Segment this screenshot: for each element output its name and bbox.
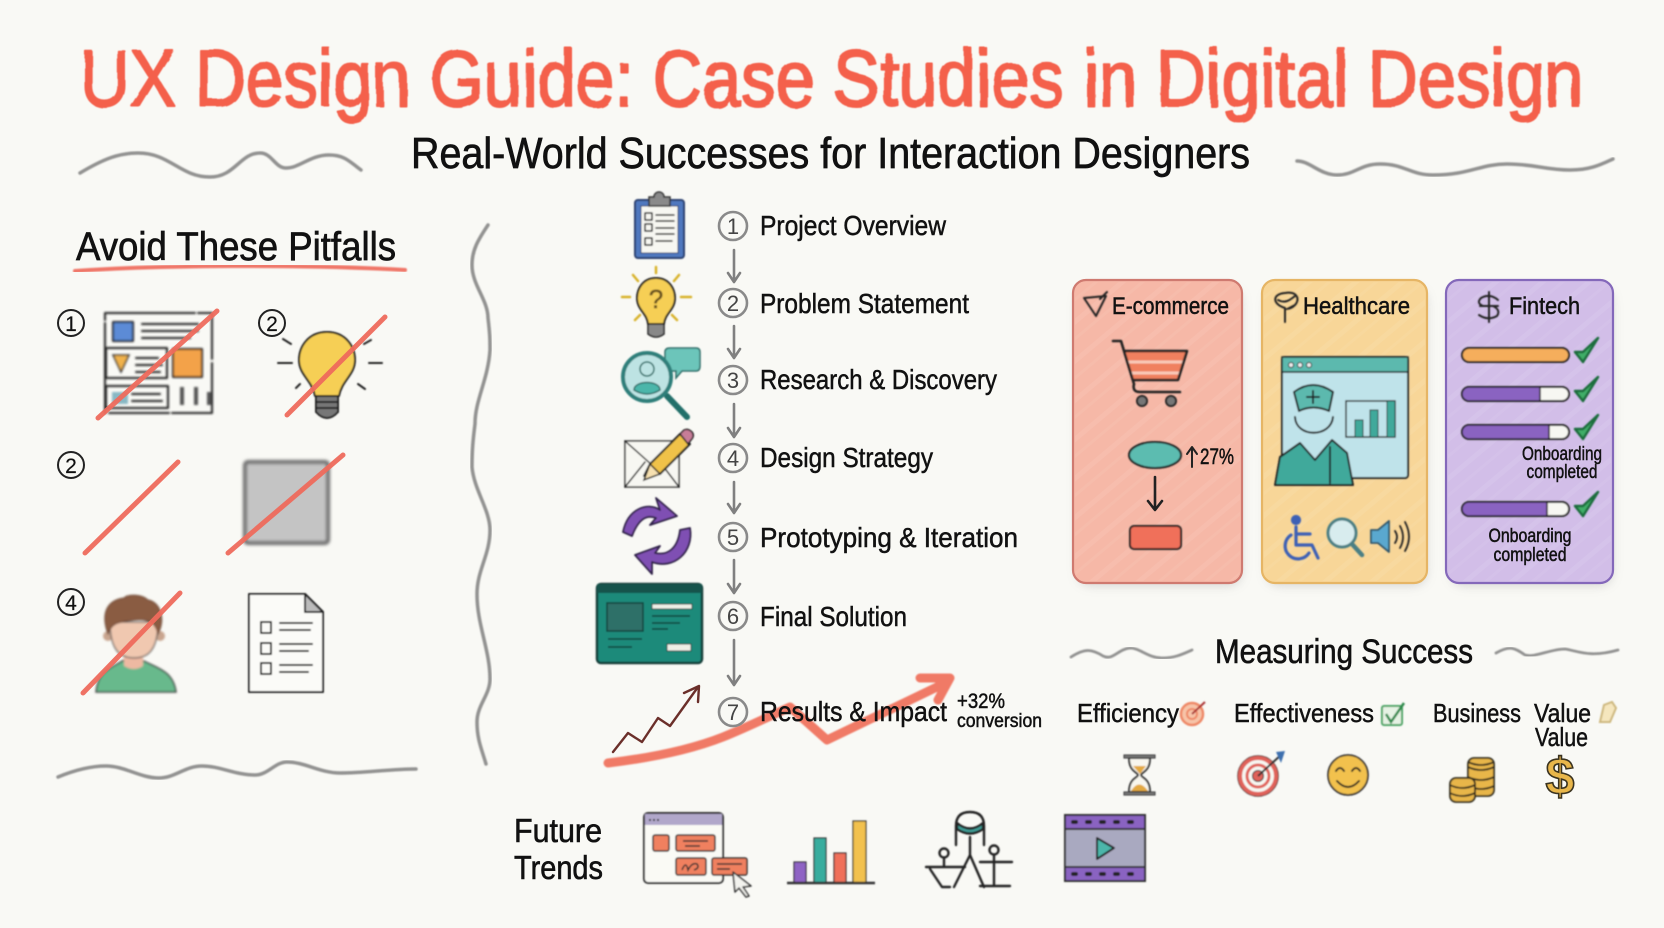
onboarding note 2: completed [1494,545,1566,566]
card background [1073,280,1242,586]
panel: avoid these pitfalls [58,225,405,693]
metric: business value: Business [1433,698,1521,728]
arrow 6 to 7 [728,640,740,685]
metric: business value: Value [1534,698,1591,728]
progress bar 1 [1462,338,1598,362]
number 2: 2 [266,313,278,336]
icon: funnel [1084,292,1107,316]
progress bar 4 [1462,492,1598,516]
right squiggle [1496,648,1618,656]
icon: shopping cart [1113,341,1187,406]
progress bar 2 [1462,377,1598,401]
step 3: 3 [727,368,739,393]
step 6: 6 [727,604,739,629]
number 1: 1 [65,313,77,336]
onboarding note 1 [1522,444,1602,483]
icon: final solution window [597,584,702,663]
step 1: Project Overview [760,210,947,241]
metric: efficiency: Efficiency [1077,698,1179,728]
step 5: Prototyping & Iteration [760,522,1018,553]
icon: hourglass [1124,755,1155,795]
step 4: Design Strategy [760,442,933,473]
icon: video film strip [1065,815,1145,881]
vertical divider squiggle [472,225,490,764]
icon: growth arrow chart [613,686,699,752]
icon: speaker [1371,521,1409,552]
panel: e-commerce card [1073,280,1242,586]
number 4: 4 [65,592,77,615]
left squiggle [1071,648,1192,658]
icon: green check box [1382,703,1404,725]
panel: measuring success [1071,633,1618,806]
illustration: telehealth window [1275,357,1408,485]
icon: bar chart [787,821,875,883]
right title squiggle [1297,159,1613,175]
metric: business value: Value [1535,722,1588,752]
uplift 27 percent: 27% [1200,444,1234,469]
icon: dollar grid [1479,292,1498,322]
panel: fintech card [1446,280,1613,586]
card background [1446,280,1613,586]
number 2 [259,310,285,336]
future trends label: Trends [514,849,603,886]
heading: Measuring Success [1215,633,1473,671]
icon: orange target [1181,702,1205,725]
panel: healthcare card [1262,280,1427,586]
icon: light bulb [278,332,382,418]
accessibility icons [1285,516,1409,559]
icon: clipboard [635,192,684,258]
onboarding note 2 [1488,526,1572,566]
arrow 1 to 2 [728,250,740,282]
large coral trend arrow [608,678,950,763]
heading underline [75,266,405,271]
uplift 27 percent [1187,444,1234,469]
step 5: 5 [727,525,739,550]
icon: grey square [245,462,328,543]
number 1 [58,310,84,336]
flow arrow [1148,477,1162,510]
step 2: 2 [727,291,739,316]
icon: question bulb [622,267,691,337]
step 7: 7 [727,700,739,725]
arrow 3 to 4 [728,404,740,437]
step 6 [719,601,907,632]
step 4: 4 [727,446,739,471]
number 4 [58,589,84,615]
flow start ellipse [1129,442,1181,468]
arrow 4 to 5 [728,482,740,513]
cross-out 2 [287,317,385,415]
left title squiggle [80,153,361,177]
onboarding note 2: Onboarding [1488,526,1572,547]
metric: business value [1433,698,1616,752]
icon: bullseye [1238,751,1285,796]
arrow 2 to 3 [728,326,740,358]
icon: iteration arrows [623,498,691,574]
icon: question bulb: ? [649,284,663,314]
onboarding note 1: completed [1526,462,1598,483]
icon: research magnifier [623,348,700,417]
panel: process timeline [597,192,1042,763]
icon: magnifier [1328,519,1362,555]
progress bars with checks [1462,338,1602,566]
left bottom squiggle [58,762,416,778]
step 7: Results & Impact [760,696,947,727]
step 6: Final Solution [760,601,907,632]
e-commerce label: E-commerce [1112,293,1229,320]
icon: robotic figure with scales [926,812,1012,887]
flow end rectangle [1130,526,1181,549]
cross-out 3 [85,462,178,553]
step 2: Problem Statement [760,288,969,319]
subtitle: Real-World Successes for Interaction Designers [411,129,1250,178]
card background [1262,280,1427,586]
icon: stethoscope [1275,293,1298,322]
healthcare label: Healthcare [1303,293,1410,320]
cross-out 1 [98,311,217,418]
icon: person [96,595,176,692]
pitfalls heading: Avoid These Pitfalls [76,225,396,269]
icon: faded coin stack [1600,702,1616,722]
conversion callout: +32% [957,690,1005,713]
icon: document checklist [249,594,323,692]
fintech label: Fintech [1509,293,1580,320]
future trends label: Future [514,812,602,849]
arrow 5 to 6 [728,560,740,593]
conversion callout [957,690,1042,732]
number 2 second [58,452,84,478]
icon: smiley [1328,755,1368,795]
progress bar 3 [1462,415,1598,439]
panel: future trends [514,812,1145,897]
icon: dollar sign: $ [1546,748,1575,806]
metric: effectiveness: Effectiveness [1234,698,1374,728]
cross-out 5 [83,593,180,693]
step 1: 1 [727,214,739,239]
icon: envelope and pencil [625,429,693,487]
conversion callout: conversion [957,711,1042,732]
icon: wheelchair [1285,516,1318,559]
icon: coins [1450,758,1494,802]
cross-out 4 [228,455,343,553]
icon: cluttered wireframe [105,313,212,413]
step 3: Research & Discovery [760,364,997,395]
number 2 second: 2 [65,455,77,478]
onboarding note 1: Onboarding [1522,444,1602,465]
future trends label [514,812,603,886]
icon: interface window with cursor [644,813,751,897]
